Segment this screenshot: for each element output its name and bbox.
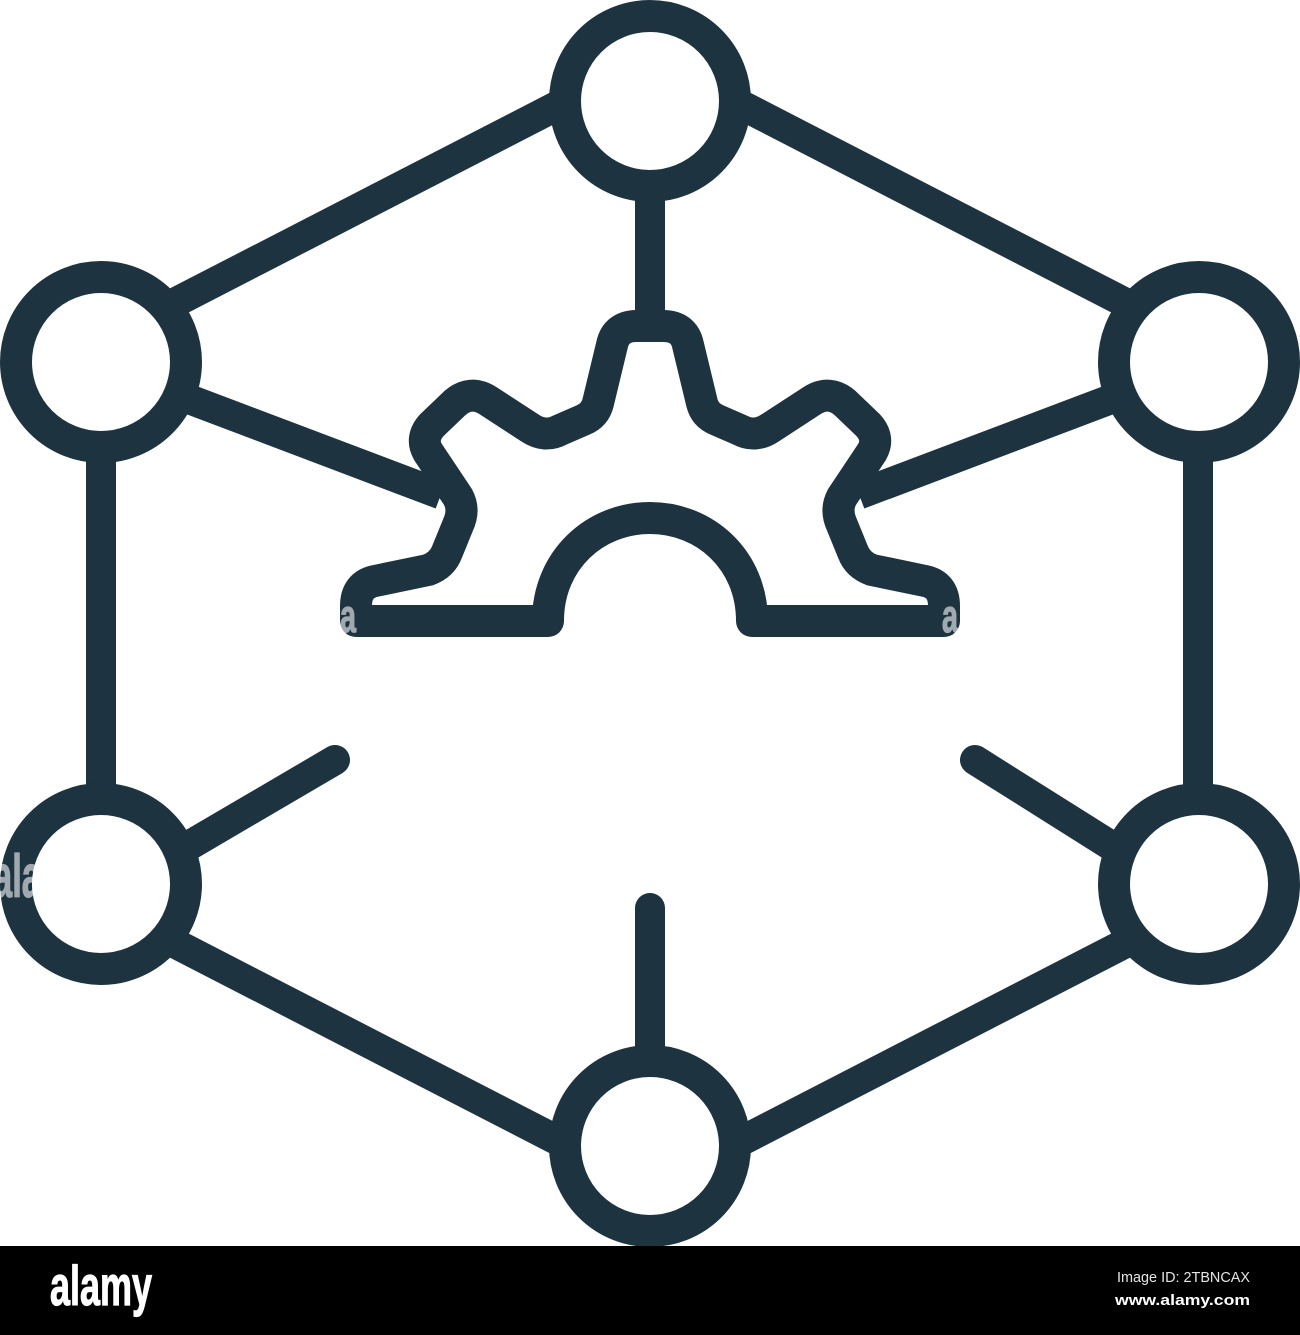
spokes connecting to gear bbox=[170, 190, 1130, 494]
watermark fragments: a bbox=[942, 590, 958, 642]
gear bbox=[356, 326, 944, 621]
website: www.alamy.com bbox=[1114, 1292, 1250, 1309]
footer logo: alamy bbox=[50, 1254, 152, 1317]
watermark fragments bbox=[0, 590, 958, 910]
hexagon edges bbox=[101, 93, 1198, 1153]
watermark fragments: a bbox=[340, 590, 356, 642]
image id: Image ID: 2TBNCAX bbox=[1117, 1269, 1250, 1286]
footer bar bbox=[0, 1246, 1300, 1335]
open spokes pointing inward bbox=[190, 760, 1110, 1060]
